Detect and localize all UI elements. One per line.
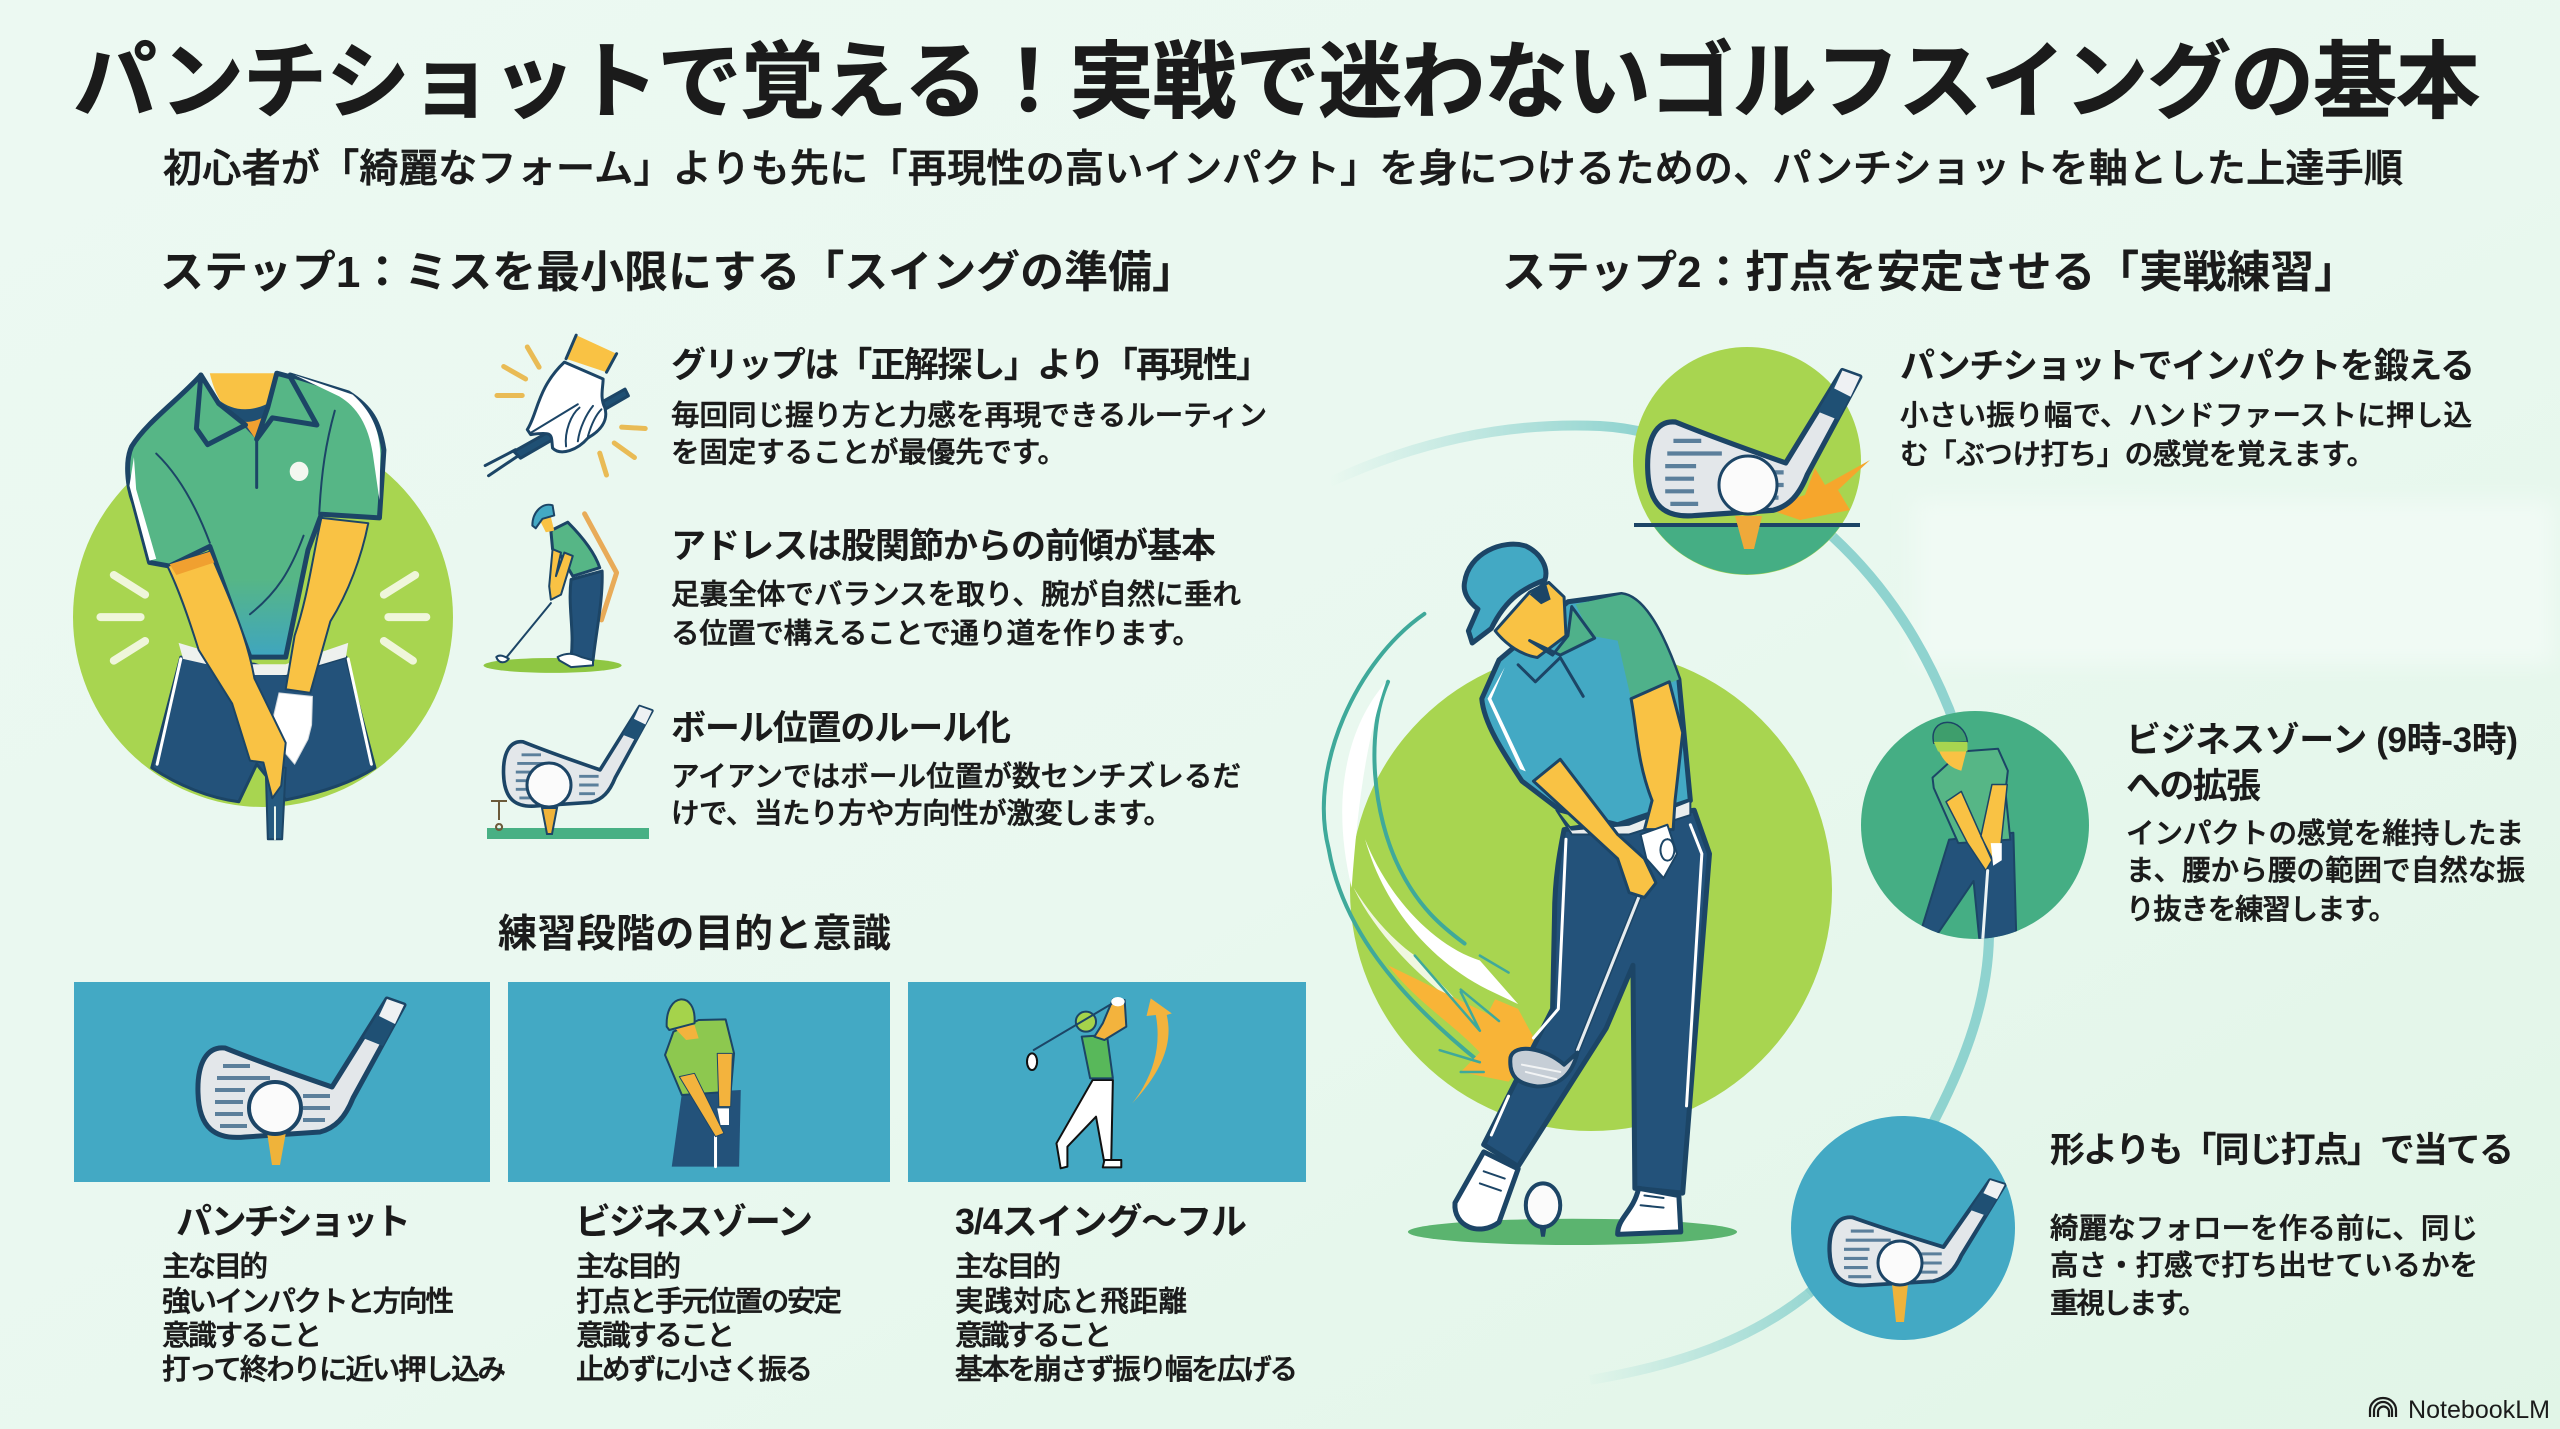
golfer figure [1324,544,1737,1245]
column heading: パンチショット [176,1201,411,1242]
column: three-quarter to full: 実践対応と飛距離 [955,1286,1187,1318]
node: business zone [1861,711,2525,943]
heading: ビジネスゾーン (9時-3時) [2126,721,2518,760]
column text: 主な目的 [162,1251,268,1283]
icon: golfer front view [665,999,741,1167]
icon: iron and teed ball [487,707,652,839]
lime circle [73,427,453,807]
arc connecting step 2 nodes [1330,425,1989,1380]
description: 綺麗なフォローを作る前に、同じ [2050,1213,2478,1245]
column: punch shot: 意識すること [162,1320,322,1352]
column: three-quarter to full [955,1201,1298,1386]
node: punch shot impact [1633,347,2475,575]
column heading: 3/4スイング〜フル [955,1201,1247,1242]
node: same impact point: 重視します。 [2050,1288,2207,1320]
column heading: ビジネスゾーン [575,1201,813,1242]
panel: business zone image [508,982,890,1182]
item: ball position: けで、当たり方や方向性が激変します。 [671,798,1172,830]
heading: グリップは「正解探し」より「再現性」 [671,346,1271,385]
heading: practice stages: 練習段階の目的と意識 [498,913,891,956]
illustration: address posture front view [73,373,453,839]
node circle [1861,711,2089,939]
item: address [483,505,1241,673]
column text: 主な目的 [576,1251,681,1283]
icon: golfer in address posture [483,505,622,673]
description: 小さい振り幅で、ハンドファーストに押し込 [1900,400,2472,432]
item: grip [485,335,1271,476]
column: punch shot: 強いインパクトと方向性 [162,1286,454,1318]
description: インパクトの感覚を維持したま [2126,818,2524,850]
panel: three-quarter swing image [908,982,1306,1182]
item: ball position [487,707,1241,839]
column: punch shot: 打って終わりに近い押し込み [162,1354,506,1386]
illustration: main golfer at impact [1324,544,1832,1245]
heading: step 1: ステップ1：ミスを最小限にする「スイングの準備」 [160,248,1196,297]
lime circle [1350,649,1832,1131]
heading: ボール位置のルール化 [671,709,1011,748]
icon: golfer at top of swing [1027,997,1172,1168]
heading: パンチショットでインパクトを鍛える [1900,347,2475,386]
heading: アドレスは股関節からの前傾が基本 [671,527,1216,566]
subtitle: 初心者が「綺麗なフォーム」よりも先に「再現性の高いインパクト」を身につけるための、パンチショットを軸とした上達手順 [163,148,2403,191]
icon: iron and ball [1829,1180,2005,1322]
node circle [1791,1116,2015,1340]
column: business zone: 意識すること [576,1320,735,1352]
column: three-quarter to full: 意識すること [955,1320,1112,1352]
description: 足裏全体でバランスを取り、腕が自然に垂れ [671,579,1241,611]
column: business zone: 打点と手元位置の安定 [576,1286,842,1318]
watermark: NotebookLM: NotebookLM [2408,1396,2550,1424]
column: three-quarter to full: 基本を崩さず振り幅を広げる [955,1354,1298,1386]
column: business zone: 止めずに小さく振る [576,1354,813,1386]
node: same impact point [1791,1116,2514,1340]
node: punch shot impact: む「ぶつけ打ち」の感覚を覚えます。 [1900,439,2375,471]
icon: NotebookLM logo [2370,1398,2396,1417]
golfer upper body [100,373,426,839]
node: business zone: り抜きを練習します。 [2126,894,2397,926]
description: 毎回同じ握り方と力感を再現できるルーティン [671,400,1267,432]
icon: iron, ball and spark [1634,371,1870,549]
node: business zone: ま、腰から腰の範囲で自然な振 [2126,855,2525,887]
item: grip: を固定することが最優先です。 [671,437,1066,469]
icon: gloved hand on grip [485,335,645,476]
heading: 形よりも「同じ打点」で当てる [2050,1131,2514,1170]
node circle [1633,347,1861,575]
icon: iron and ball [198,999,404,1165]
panel: punch shot image [74,982,490,1182]
heading: step 2: ステップ2：打点を安定させる「実戦練習」 [1502,248,2358,297]
column text: 主な目的 [955,1251,1061,1283]
icon: golfer front view [1922,722,2016,943]
node: same impact point: 高さ・打感で打ち出せているかを [2050,1250,2478,1282]
description: アイアンではボール位置が数センチズレるだ [671,761,1241,793]
item: address: る位置で構えることで通り道を作ります。 [671,618,1201,650]
node: business zone: への拡張 [2126,767,2261,806]
title: パンチショットで覚える！実戦で迷わないゴルフスイングの基本 [73,35,2480,129]
column: business zone [575,1201,842,1386]
column: punch shot [162,1201,506,1386]
